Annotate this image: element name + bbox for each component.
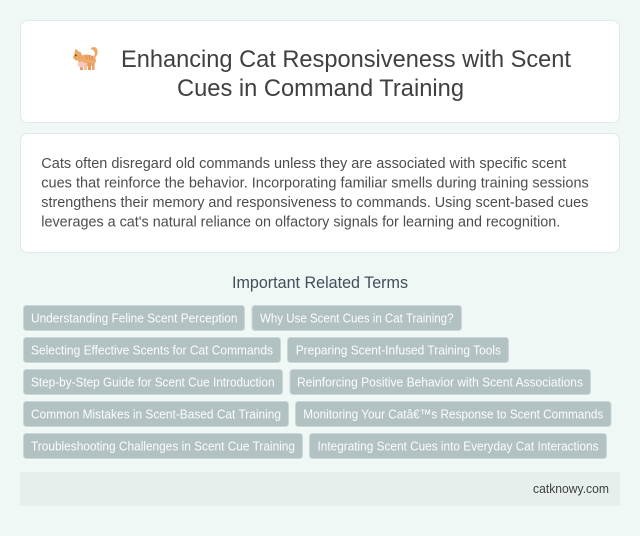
panel: title card — [20, 20, 620, 122]
panel: description — [20, 134, 620, 252]
tag — [24, 370, 282, 394]
title — [121, 46, 571, 102]
tag: Why Use Scent Cues in Cat Training? — [260, 310, 454, 326]
text block: description: cues that reinforce the behavior. Incorporating familiar smells during training sessions — [41, 176, 589, 192]
tag — [24, 338, 280, 362]
title: Enhancing Cat Responsiveness with Scent — [121, 46, 571, 73]
text block: description: leverages a cat's natural reliance on olfactory signals for learning and recognition. — [41, 214, 560, 230]
tag: Preparing Scent-Infused Training Tools — [296, 342, 501, 358]
tag: Understanding Feline Scent Perception — [31, 310, 238, 326]
tag: Monitoring Your Catâ€™s Response to Scent Commands — [303, 406, 604, 422]
title: Cues in Command Training — [177, 75, 464, 102]
heading: related terms: Important Related Terms — [232, 274, 408, 292]
tag: Troubleshooting Challenges in Scent Cue Training — [31, 438, 295, 454]
text block: description: strengthens their memory and responsiveness to commands. Using scent-based cues — [41, 195, 588, 211]
text block: description — [41, 156, 589, 230]
tag — [24, 434, 302, 458]
tag — [24, 306, 244, 330]
panel: footer — [20, 472, 620, 506]
tag — [288, 338, 508, 362]
tag — [310, 434, 606, 458]
panel: related terms tags — [24, 306, 611, 458]
tag: Common Mistakes in Scent-Based Cat Training — [31, 406, 281, 422]
tag — [296, 402, 611, 426]
tag — [290, 370, 590, 394]
text block: description: Cats often disregard old commands unless they are associated with specific scent — [41, 156, 566, 172]
tag: Step-by-Step Guide for Scent Cue Introduction — [31, 374, 274, 390]
tag — [252, 306, 462, 330]
tag: Integrating Scent Cues into Everyday Cat Interactions — [318, 438, 599, 454]
icon: cat — [73, 47, 98, 70]
tag — [24, 402, 288, 426]
tag: Selecting Effective Scents for Cat Commands — [31, 342, 273, 358]
tag: Reinforcing Positive Behavior with Scent Associations — [297, 374, 583, 390]
footer source: catknowy.com — [533, 481, 609, 496]
